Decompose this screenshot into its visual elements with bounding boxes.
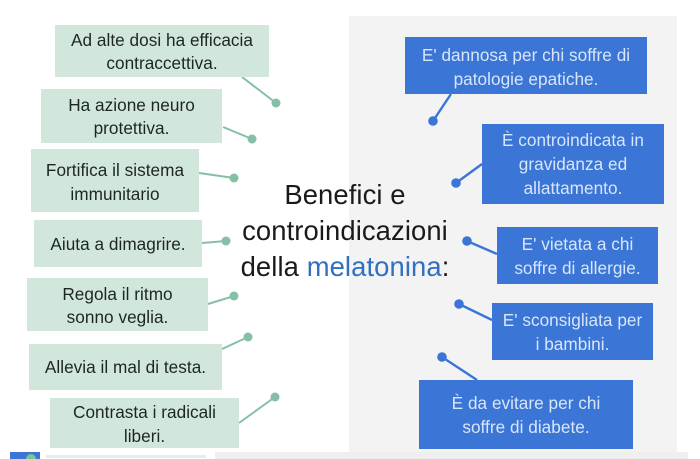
- benefit: sistema immunitario: Fortifica il sistema: [46, 160, 184, 180]
- benefit: contraccettiva: [55, 25, 269, 77]
- benefit: neuro protettiva: protettiva.: [94, 118, 169, 138]
- benefit: sistema immunitario: [31, 149, 199, 212]
- strip faint text: [46, 455, 206, 458]
- benefit: radicali liberi: Contrasta i radicali: [73, 402, 216, 422]
- contraindication: epatiche: E' dannosa per chi soffre di: [422, 44, 630, 64]
- contraindication: epatiche: [405, 37, 647, 94]
- benefit: sonno veglia: Regola il ritmo: [62, 284, 173, 304]
- benefit: contraccettiva: contraccettiva.: [106, 53, 218, 73]
- benefit: radicali liberi: liberi.: [124, 426, 165, 446]
- benefit: contraccettiva: Ad alte dosi ha efficacia: [71, 30, 253, 50]
- panel: contraindications background: [349, 16, 677, 452]
- connector: bambini: [454, 299, 492, 320]
- contraindication: diabete: È da evitare per chi: [452, 392, 600, 412]
- benefit: dimagrire: Aiuta a dimagrire.: [50, 234, 186, 254]
- connector: dimagrire: [202, 236, 230, 246]
- connector: allergie: [462, 236, 497, 254]
- benefit: dimagrire: [34, 220, 202, 267]
- connector: radicali liberi: [239, 392, 280, 423]
- benefit: sonno veglia: sonno veglia.: [67, 306, 168, 326]
- benefit: neuro protettiva: Ha azione neuro: [68, 95, 195, 115]
- benefit: radicali liberi: [50, 398, 239, 448]
- contraindication: gravidanza: allattamento.: [524, 178, 622, 198]
- contraindication: allergie: soffre di allergie.: [514, 258, 641, 278]
- contraindication: gravidanza: gravidanza ed: [519, 154, 627, 174]
- contraindication: diabete: [419, 380, 633, 449]
- contraindication: gravidanza: [482, 124, 664, 204]
- connector: mal di testa: [222, 332, 252, 349]
- connector: neuro protettiva: [223, 127, 256, 144]
- connector: gravidanza: [451, 164, 482, 188]
- title: Benefici e: [284, 179, 406, 210]
- benefit: sonno veglia: [27, 278, 208, 331]
- contraindication: bambini: i bambini.: [536, 334, 609, 354]
- connector: sonno veglia: [208, 292, 238, 304]
- connector: contraccettiva: [242, 77, 280, 108]
- strip grey area: [215, 452, 688, 459]
- contraindication: epatiche: patologie epatiche.: [454, 68, 598, 88]
- title: controindicazioni: [242, 215, 448, 246]
- contraindication: diabete: soffre di diabete.: [462, 416, 590, 436]
- title: [241, 179, 449, 282]
- benefit: mal di testa: [29, 344, 222, 390]
- contraindication: allergie: E' vietata a chi: [522, 234, 633, 254]
- contraindication: allergie: [497, 227, 658, 284]
- contraindication: gravidanza: È controindicata in: [502, 130, 644, 150]
- connector: diabete: [437, 352, 477, 380]
- benefit: neuro protettiva: [41, 89, 222, 143]
- strip green icon: [26, 454, 36, 459]
- contraindication: bambini: [492, 303, 653, 360]
- strip blue icon: [10, 452, 40, 459]
- connector: epatiche: [428, 94, 451, 126]
- connector: immunitario: [199, 173, 238, 182]
- benefit: sistema immunitario: immunitario: [70, 184, 160, 204]
- contraindication: bambini: E' sconsigliata per: [503, 310, 642, 330]
- bottom browser strip: [0, 452, 700, 459]
- title: della melatonina:: [241, 251, 449, 282]
- benefit: mal di testa: Allevia il mal di testa.: [45, 357, 206, 377]
